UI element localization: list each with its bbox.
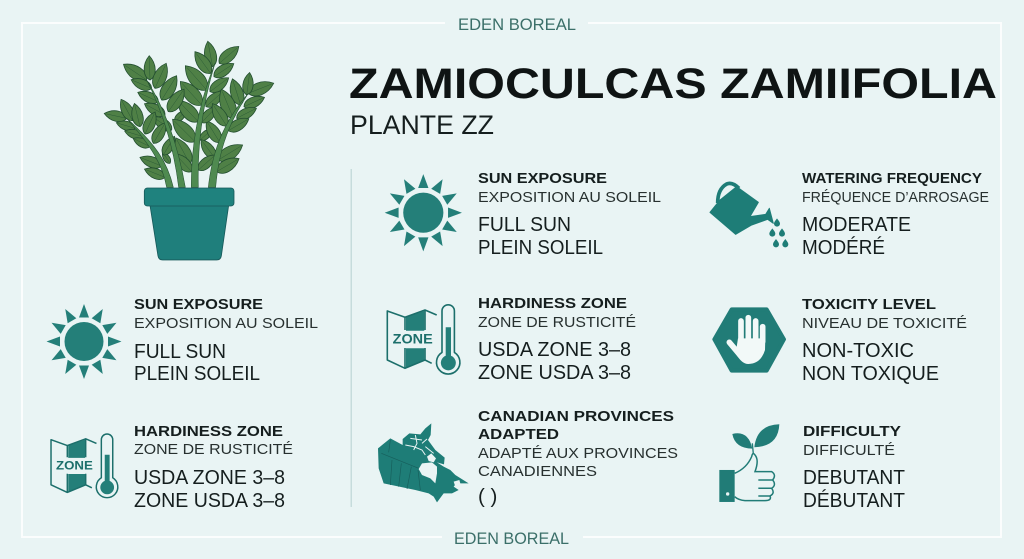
text: hardiness zone: USDA ZONE 3–8 — [134, 466, 285, 489]
panel: hardiness zone (middle) — [387, 295, 636, 384]
text: canadian provinces: ( ) — [478, 485, 497, 508]
column divider — [350, 169, 352, 507]
text: sun exposure: SUN EXPOSURE — [478, 170, 607, 187]
panel: hardiness zone (left) — [51, 423, 293, 512]
text: toxicity level — [802, 296, 967, 385]
panel: watering frequency — [710, 170, 989, 259]
text: sun exposure: FULL SUN — [134, 340, 226, 363]
icon: zone map and thermometer: ZONE — [393, 331, 433, 346]
text: difficulty: DÉBUTANT — [803, 489, 905, 512]
pot — [144, 188, 234, 260]
icon: watering can — [710, 183, 788, 247]
text: canadian provinces: ADAPTÉ AUX PROVINCES — [478, 445, 678, 462]
text: hardiness zone: USDA ZONE 3–8 — [478, 338, 631, 361]
icon: zone map and thermometer — [387, 305, 460, 374]
text: hardiness zone — [478, 295, 636, 384]
panel: toxicity level — [714, 296, 967, 385]
text: canadian provinces: ADAPTED — [478, 426, 559, 443]
text: difficulty: DIFFICULTY — [803, 423, 901, 440]
text: watering frequency: WATERING FREQUENCY — [802, 170, 982, 187]
text: toxicity level: NON-TOXIC — [802, 339, 914, 362]
brand header: EDEN BOREAL — [458, 16, 576, 34]
text: watering frequency: MODERATE — [802, 213, 911, 236]
text: toxicity level: TOXICITY LEVEL — [802, 296, 936, 313]
text: difficulty: DEBUTANT — [803, 466, 905, 489]
text: watering frequency: MODÉRÉ — [802, 236, 885, 259]
text: hardiness zone: ZONE USDA 3–8 — [134, 489, 285, 512]
text: sun exposure: SUN EXPOSURE — [134, 296, 263, 313]
text: hardiness zone: HARDINESS ZONE — [134, 423, 283, 440]
panel: difficulty — [719, 423, 905, 512]
panel: canadian provinces — [378, 408, 678, 508]
text: sun exposure: FULL SUN — [478, 213, 571, 236]
text: sun exposure: PLEIN SOLEIL — [478, 236, 603, 259]
text: difficulty: DIFFICULTÉ — [803, 442, 895, 459]
text: hardiness zone: ZONE DE RUSTICITÉ — [478, 314, 636, 331]
text: sun exposure: PLEIN SOLEIL — [134, 362, 260, 385]
icon: zone map and thermometer — [51, 434, 118, 498]
text: canadian provinces: CANADIENNES — [478, 463, 597, 480]
panel: sun exposure (middle) — [385, 170, 661, 259]
text: canadian provinces — [478, 408, 678, 508]
panel: sun exposure (left) — [46, 296, 318, 385]
text: toxicity level: NIVEAU DE TOXICITÉ — [802, 315, 967, 332]
text: sun exposure — [134, 296, 318, 385]
text: difficulty — [803, 423, 905, 512]
text: hardiness zone: HARDINESS ZONE — [478, 295, 627, 312]
subtitle: PLANTE ZZ — [350, 110, 494, 140]
text: sun exposure: EXPOSITION AU SOLEIL — [478, 189, 661, 206]
text: sun exposure — [478, 170, 661, 259]
text: hardiness zone: ZONE USDA 3–8 — [478, 361, 631, 384]
icon: thumbs up with sprout — [719, 424, 779, 502]
title: ZAMIOCULCAS ZAMIIFOLIA — [349, 60, 997, 108]
icon: zone map and thermometer: ZONE — [56, 458, 93, 472]
text: watering frequency — [802, 170, 989, 259]
text: hardiness zone: ZONE DE RUSTICITÉ — [134, 441, 293, 458]
illustration: potted ZZ plant — [103, 40, 276, 260]
icon: sun — [46, 304, 122, 379]
brand footer: EDEN BOREAL — [454, 530, 569, 548]
plant stems — [127, 63, 248, 187]
text: watering frequency: FRÉQUENCE D’ARROSAGE — [802, 189, 989, 206]
text: sun exposure: EXPOSITION AU SOLEIL — [134, 315, 318, 332]
icon: map of Canada — [378, 423, 469, 502]
text: toxicity level: NON TOXIQUE — [802, 362, 939, 385]
plant leaves — [103, 40, 276, 182]
icon: hand in hexagon — [714, 309, 784, 371]
text: canadian provinces: CANADIAN PROVINCES — [478, 408, 674, 425]
icon: sun — [385, 174, 462, 251]
text: hardiness zone — [134, 423, 293, 512]
